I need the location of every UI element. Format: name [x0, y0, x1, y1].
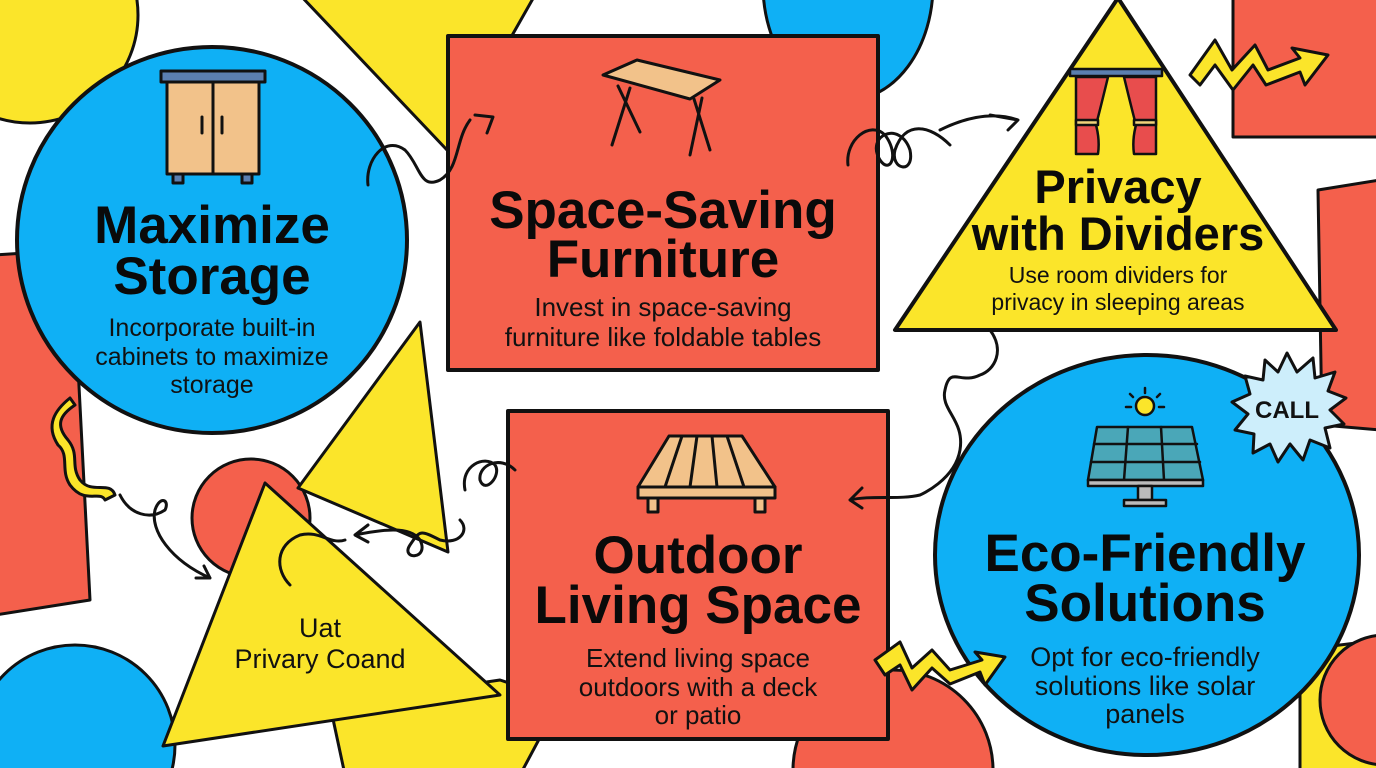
text block: stray triangle text: Privary Coand	[234, 644, 406, 674]
panel: privacy with dividers: with Dividers	[971, 207, 1264, 260]
icon: folding table	[603, 60, 720, 155]
panel: eco-friendly solutions: Opt for eco-friendly	[1030, 642, 1260, 672]
icon: cabinet	[161, 71, 265, 183]
panel: outdoor living space: Living Space	[535, 576, 861, 635]
panel: privacy with dividers	[895, 0, 1336, 330]
icon: curtains	[1070, 69, 1162, 154]
panel: space-saving furniture: Furniture	[547, 230, 779, 289]
panel: privacy with dividers: privacy in sleeping areas	[991, 289, 1245, 315]
panel: space-saving furniture	[448, 36, 878, 370]
panel: eco-friendly solutions	[935, 355, 1359, 755]
panel: outdoor living space: Outdoor	[594, 526, 802, 585]
panel: privacy with dividers: Privacy	[1034, 160, 1202, 213]
panel: maximize storage	[17, 47, 407, 433]
arrows	[120, 115, 1018, 585]
icon: deck	[638, 436, 775, 512]
panel: maximize storage: cabinets to maximize	[95, 343, 329, 371]
panel: maximize storage: Incorporate built-in	[108, 314, 316, 342]
panel: maximize storage: storage	[170, 371, 254, 399]
icon: yellow zigzag arrows	[52, 40, 1328, 690]
panel: outdoor living space	[508, 411, 888, 739]
text block: stray triangle text	[234, 613, 406, 674]
callout: CALL burst: CALL	[1255, 397, 1319, 424]
panel: eco-friendly solutions: solutions like solar	[1035, 671, 1255, 701]
callout: CALL burst	[1232, 353, 1346, 462]
panel: outdoor living space: or patio	[655, 700, 741, 730]
icon: solar panel	[1088, 388, 1203, 506]
panel: eco-friendly solutions: Solutions	[1024, 574, 1266, 633]
panel: outdoor living space: Extend living space	[586, 643, 810, 673]
panel: maximize storage: Storage	[113, 247, 311, 306]
panel: space-saving furniture: Invest in space-saving	[534, 292, 792, 322]
panel: outdoor living space: outdoors with a deck	[579, 672, 818, 702]
panel: eco-friendly solutions: panels	[1105, 699, 1185, 729]
panel: space-saving furniture: Space-Saving	[489, 181, 837, 240]
panel: maximize storage: Maximize	[94, 196, 330, 255]
text block: stray triangle text: Uat	[299, 613, 341, 643]
panel: eco-friendly solutions: Eco-Friendly	[984, 524, 1306, 583]
panel: space-saving furniture: furniture like foldable tables	[505, 322, 821, 352]
panel: privacy with dividers: Use room dividers for	[1009, 262, 1228, 288]
